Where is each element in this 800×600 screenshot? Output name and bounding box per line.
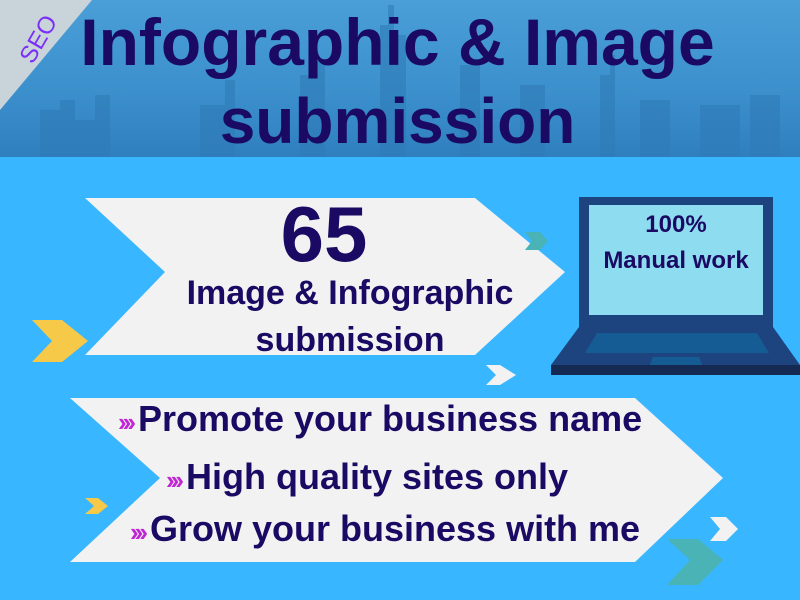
- SEO corner tag: SEO: [14, 11, 63, 68]
- SEO corner tag: [0, 0, 92, 110]
- title: Infographic & Image: [80, 5, 715, 79]
- skyline silhouette: [40, 5, 780, 126]
- laptop icon: 100%: [645, 211, 707, 238]
- laptop icon: [551, 197, 800, 375]
- arrow panel: 65 submissions: 65: [281, 190, 367, 278]
- bullet list: ›››High quality sites only: [166, 456, 568, 497]
- arrow panel: 65 submissions: Image & Infographic: [187, 274, 513, 312]
- arrow panel: 65 submissions: submission: [256, 321, 444, 359]
- header banner: [0, 0, 800, 157]
- small chevrons: [32, 320, 88, 362]
- bullet list: ›››Promote your business name: [118, 398, 642, 439]
- bullet list: ›››Grow your business with me: [130, 508, 640, 549]
- bullet list: [118, 398, 642, 549]
- title: [80, 5, 715, 157]
- laptop icon: Manual work: [603, 247, 749, 274]
- title: submission: [220, 85, 575, 157]
